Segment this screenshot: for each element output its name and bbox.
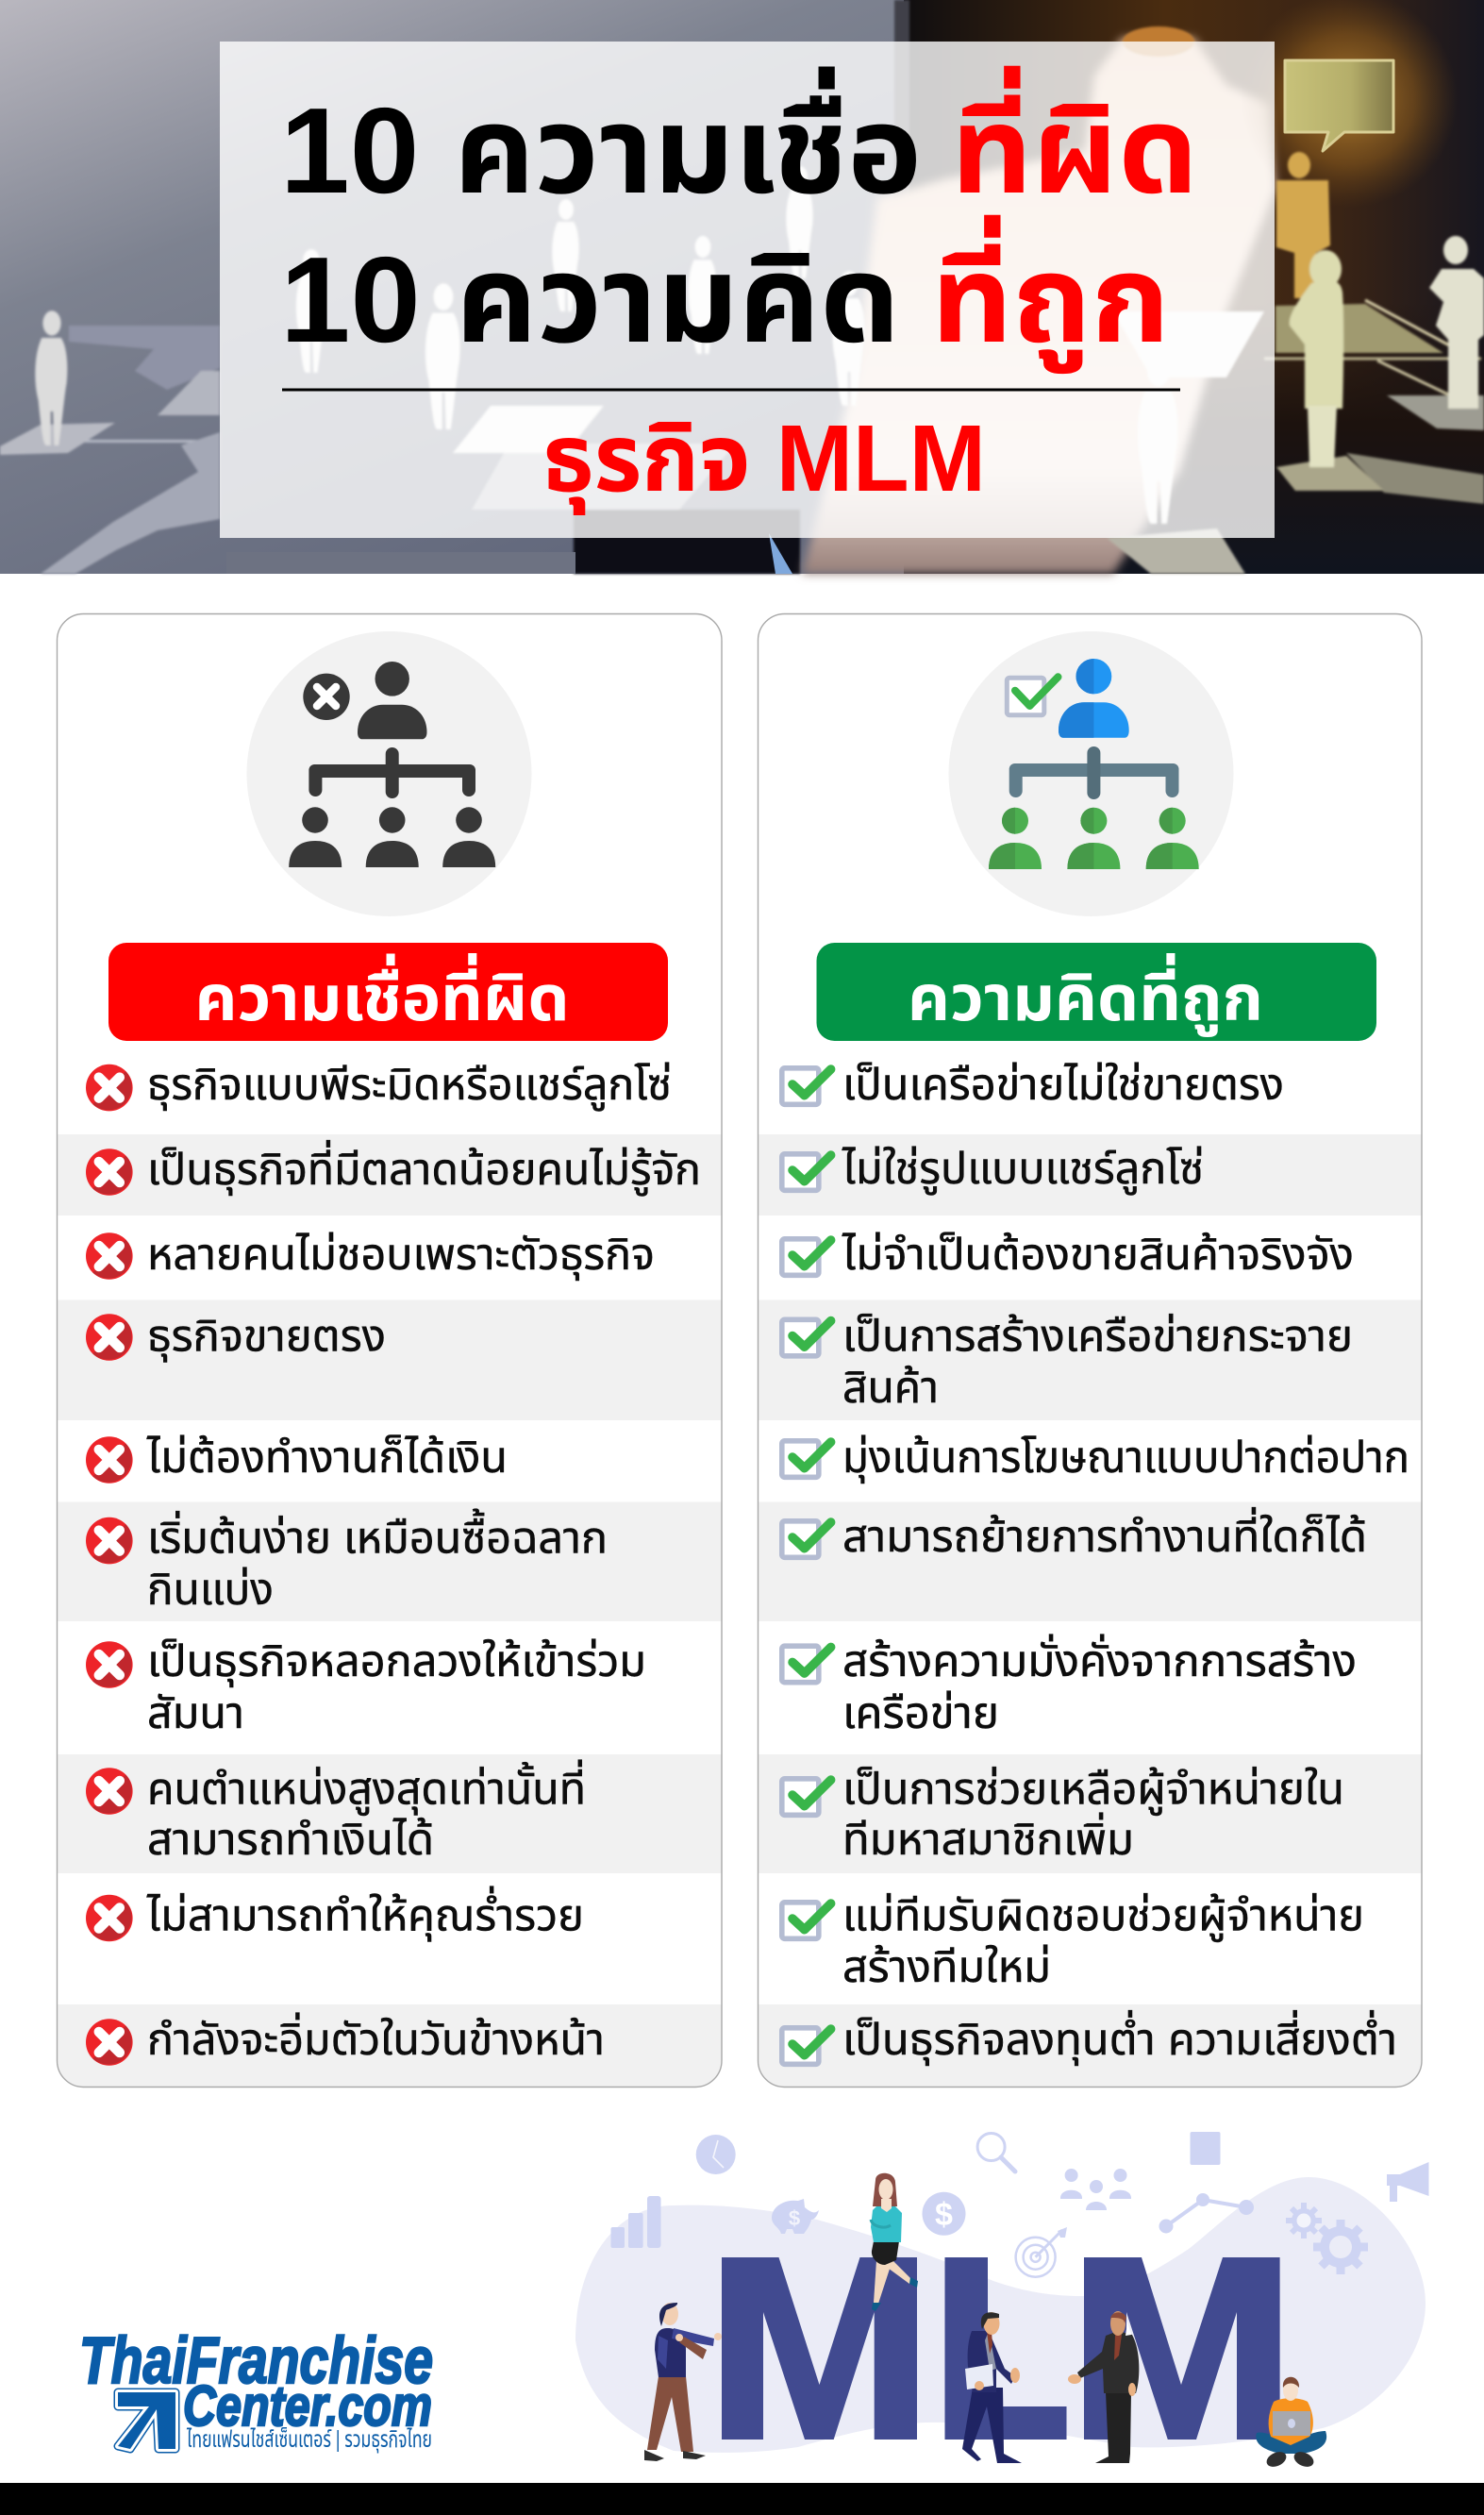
item 7: เป็นธุรกิจหลอกลวงให้เข้าร่วม [147, 1636, 646, 1687]
map: left [0, 310, 220, 574]
person: man pointing [644, 2303, 722, 2461]
subtitle: ธุรกิจ MLM [542, 406, 986, 515]
person: man in black suit [1068, 2311, 1139, 2463]
title line 2 [280, 214, 1170, 374]
item 7 [86, 1636, 646, 1737]
illustration: MLM team: $ [935, 2197, 953, 2233]
item 10: กำลังจะอิ่มตัวในวันข้างหน้า [147, 2013, 605, 2064]
logo: ThaiFranchise Center [79, 2323, 433, 2454]
item 8: ทีมหาสมาชิกเพิ่ม [842, 1813, 1134, 1864]
item 8: เป็นการช่วยเหลือผู้จำหน่ายใน [842, 1765, 1344, 1816]
item 5: มุ่งเน้นการโฆษณาแบบปากต่อปาก [842, 1433, 1409, 1484]
faint figures behind panel [296, 166, 1264, 524]
panel: right thinking [759, 613, 1422, 2087]
heading: right thinking [817, 943, 1376, 1041]
item 9: ไม่สามารถทำให้คุณร่ำรวย [146, 1886, 584, 1942]
person: woman sitting on letter [871, 2173, 918, 2311]
hand [802, 38, 1276, 574]
letters MLM [722, 2257, 1280, 2440]
icon: colour network with check badge [949, 631, 1234, 916]
logo: ThaiFranchise Center: ไทยแฟรนไชส์เซ็นเตอร์ | รวมธุรกิจไทย [186, 2426, 432, 2454]
title line 2: 10 ความคิด [280, 232, 900, 368]
item 9: แม่ทีมรับผิดชอบช่วยผู้จำหน่าย [842, 1891, 1364, 1942]
background blob [575, 2177, 1426, 2453]
background icons [611, 2132, 1428, 2277]
title panel [220, 42, 1275, 538]
item 2: เป็นธุรกิจที่มีตลาดน้อยคนไม่รู้จัก [147, 1140, 701, 1196]
heading: wrong beliefs [108, 943, 668, 1041]
item 8: สามารถทำเงินได้ [147, 1815, 434, 1864]
icon: logo arrow [118, 2392, 175, 2449]
glowing speech bubble [1241, 0, 1458, 208]
heading: wrong beliefs: ความเชื่อที่ผิด [194, 953, 570, 1034]
panel: wrong beliefs [57, 613, 722, 2087]
item 4: ธุรกิจขายตรง [147, 1312, 386, 1363]
item 8 [782, 1765, 1344, 1864]
item 7: สัมนา [147, 1688, 244, 1737]
item 3: ไม่จำเป็นต้องขายสินค้าจริงจัง [842, 1230, 1354, 1279]
heading: right thinking: ความคิดที่ถูก [908, 953, 1263, 1037]
item 6 [86, 1508, 608, 1614]
icon: dark network with x badge [247, 631, 532, 916]
item 8 [86, 1759, 586, 1864]
item 9 [782, 1891, 1364, 1991]
item 8: คนตำแหน่งสูงสุดเท่านั้นที่ [147, 1759, 586, 1816]
illustration: MLM team [575, 2132, 1428, 2470]
item 6: เริ่มต้นง่าย เหมือนซื้อฉลาก [147, 1508, 608, 1563]
title line 1: 10 ความเชื่อ [280, 66, 922, 219]
person: man in navy suit [962, 2312, 1022, 2463]
illustration: MLM team: $ [789, 2206, 800, 2230]
logo: ThaiFranchise Center: ThaiFranchise [79, 2323, 433, 2397]
item 7: เครือข่าย [842, 1688, 999, 1737]
dark lower centre [574, 510, 800, 574]
title line 2: ที่ถูก [931, 214, 1170, 374]
item 5: ไม่ต้องทำงานก็ได้เงิน [146, 1433, 508, 1482]
item 10: เป็นธุรกิจลงทุนต่ำ ความเสี่ยงต่ำ [842, 2010, 1397, 2066]
item 9: สร้างทีมใหม่ [842, 1942, 1051, 1991]
item 2: ไม่ใช่รูปแบบแชร์ลูกโซ่ [842, 1144, 1204, 1195]
item 3: หลายคนไม่ชอบเพราะตัวธุรกิจ [147, 1230, 655, 1281]
item 4 [782, 1312, 1353, 1412]
person: sitting with laptop [1256, 2377, 1326, 2470]
item 7: สร้างความมั่งคั่งจากการสร้าง [842, 1635, 1357, 1685]
item 4: เป็นการสร้างเครือข่ายกระจาย [842, 1312, 1353, 1361]
title line 1: ที่ผิด [951, 65, 1198, 219]
logo: ThaiFranchise Center: Center.com [183, 2374, 432, 2438]
item 7 [782, 1635, 1357, 1737]
item 1: เป็นเครือข่ายไม่ใช่ขายตรง [842, 1060, 1284, 1109]
item 1: ธุรกิจแบบพีระมิดหรือแชร์ลูกโซ่ [147, 1060, 672, 1111]
item 6: กินแบ่ง [147, 1565, 274, 1614]
item 4: สินค้า [842, 1363, 939, 1412]
header background photo [0, 0, 1484, 574]
footer bar [0, 2483, 1484, 2515]
network figures: right [1107, 152, 1484, 574]
item 6: สามารถย้ายการทำงานที่ใดก็ได้ [842, 1507, 1367, 1561]
title line 1 [280, 65, 1198, 219]
